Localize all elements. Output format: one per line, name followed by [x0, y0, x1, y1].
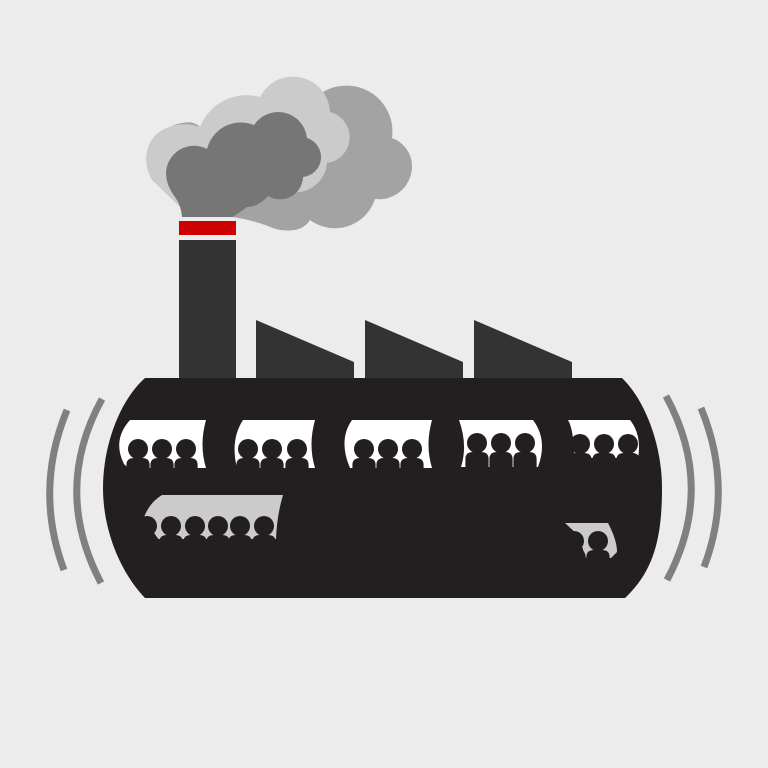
vibration arcs left [50, 399, 102, 583]
window row 2, grey window left [135, 495, 283, 552]
sawtooth roofs [256, 320, 572, 380]
factory body [103, 378, 662, 598]
chimney red band [179, 221, 236, 235]
window row 1, window 1 [119, 420, 206, 475]
chimney stack [179, 240, 236, 380]
window row 1, window 5 [568, 420, 640, 470]
window row 1, window 3 [344, 420, 432, 475]
smoke cloud: dark [166, 112, 321, 217]
window row 1, window 2 [235, 420, 315, 475]
chimney [179, 221, 236, 380]
window row 2, grey window right [562, 523, 617, 567]
smoke cloud: light [146, 77, 350, 207]
vibration arcs right [666, 396, 718, 580]
smoke cloud: back [172, 86, 412, 231]
window row 1, window 4 [459, 420, 542, 469]
